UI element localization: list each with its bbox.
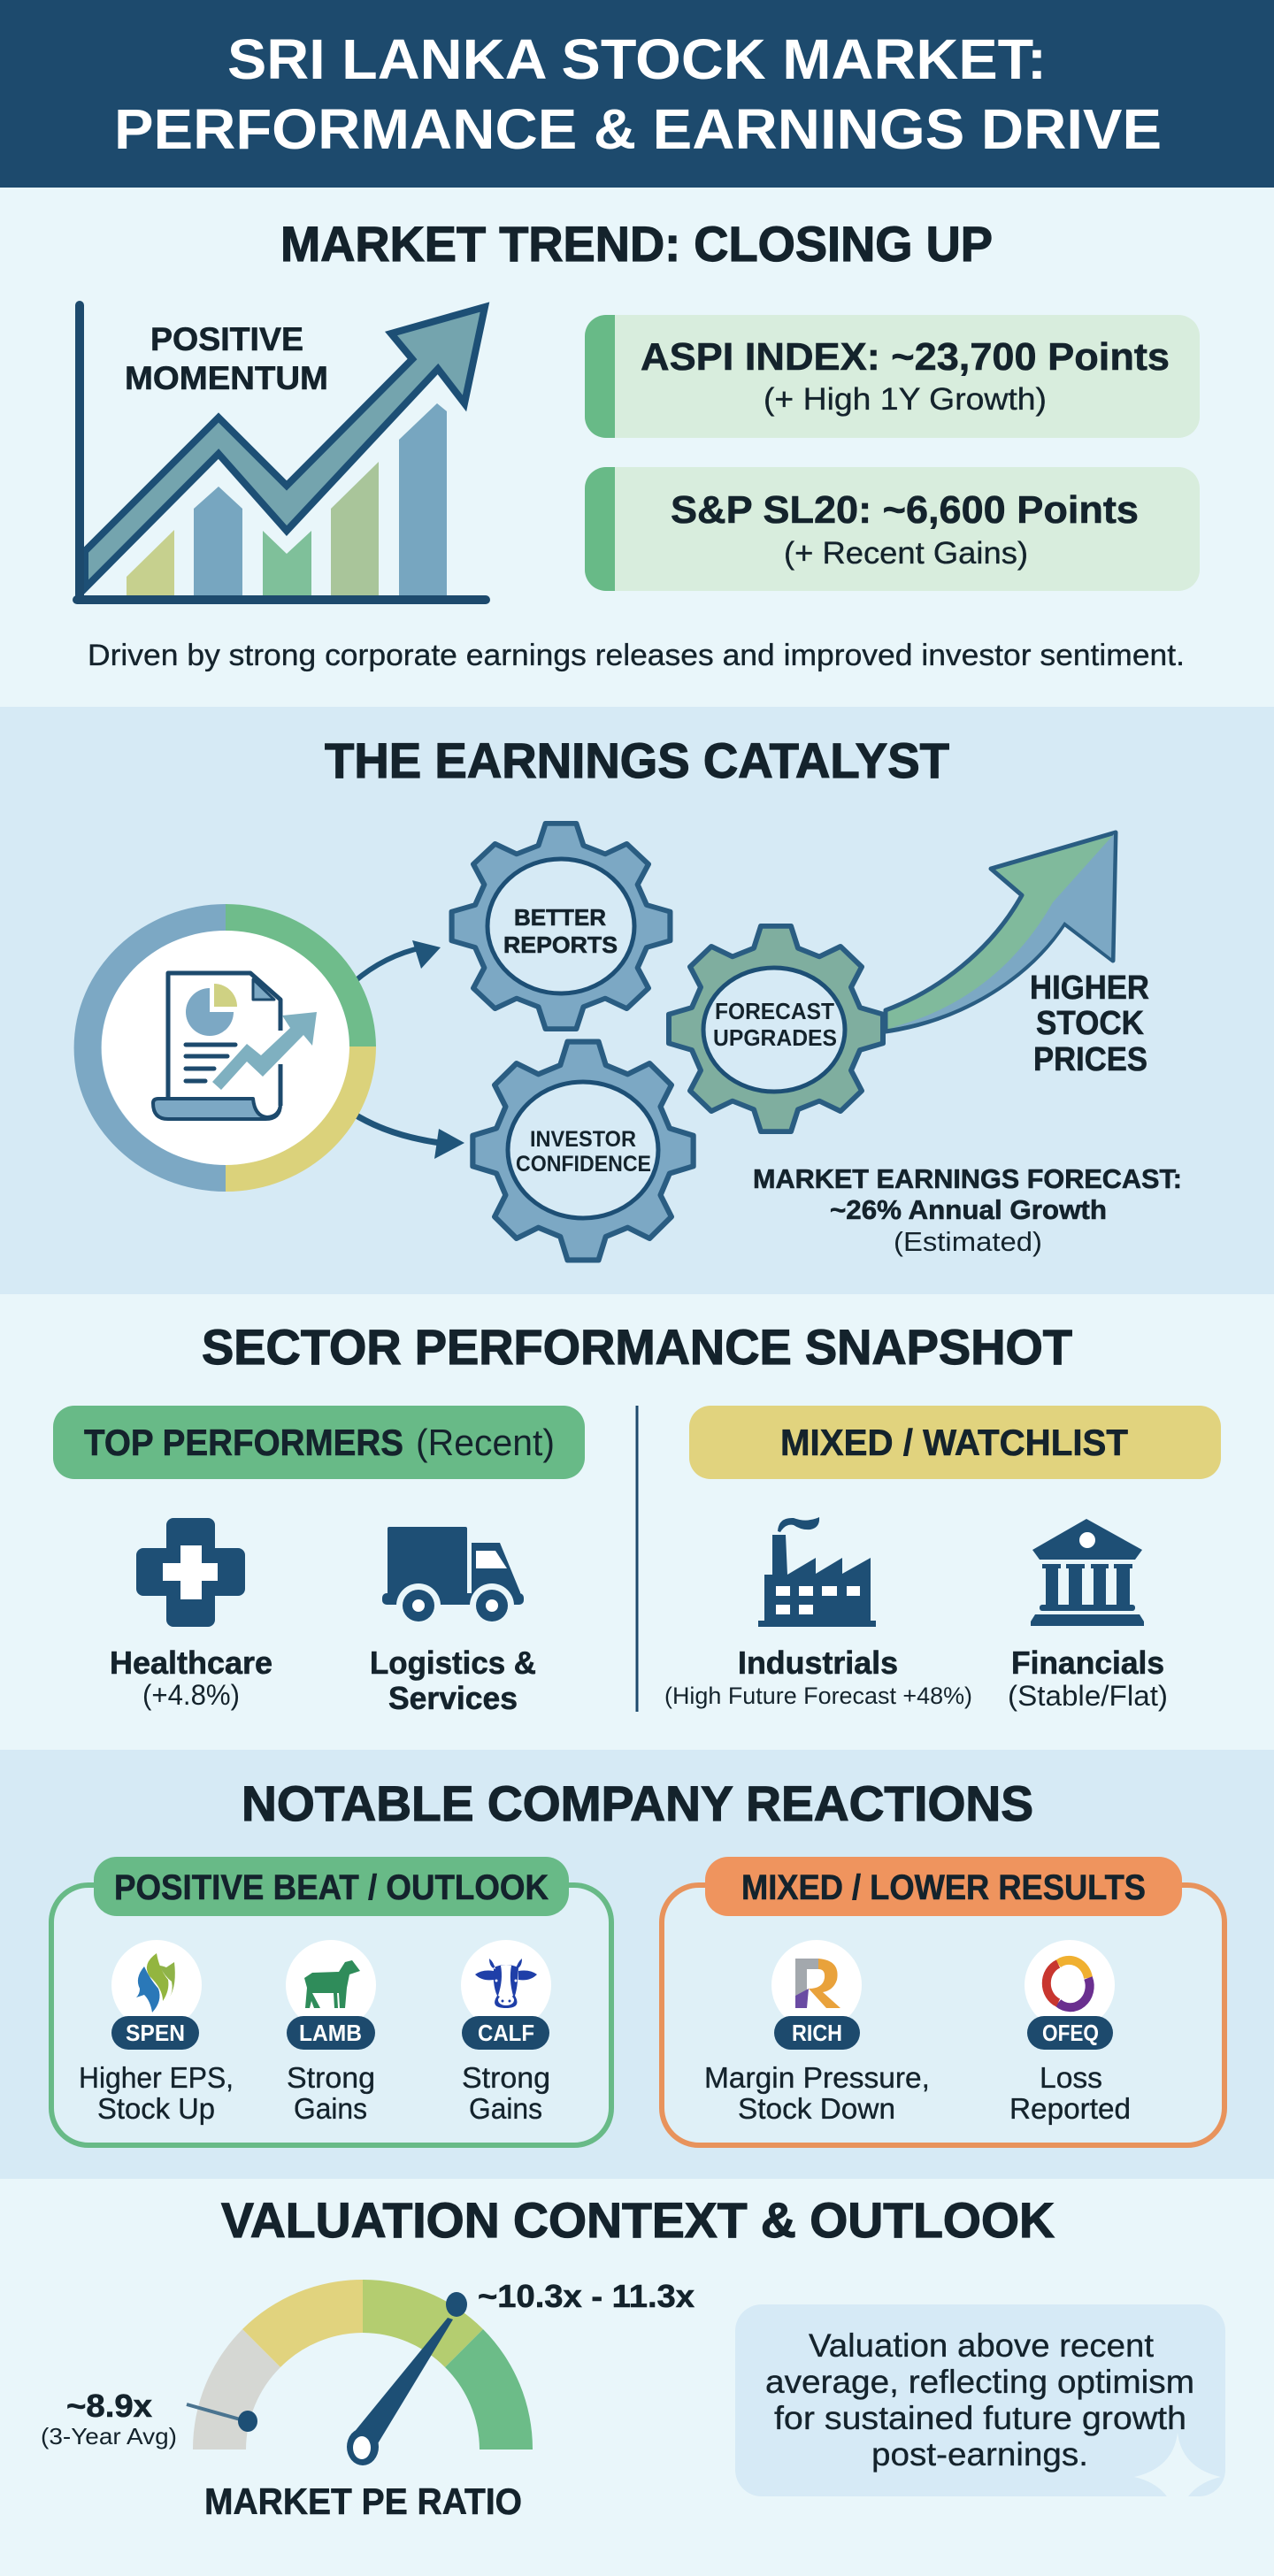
icon: document	[153, 973, 317, 1119]
gear: investor confidence: INVESTOR	[530, 1127, 636, 1152]
pill: mixed watchlist: MIXED / WATCHLIST	[780, 1422, 1128, 1463]
pill: mixed lower results	[705, 1857, 1182, 1916]
label: three year PE	[41, 2388, 177, 2450]
icon: bank	[1031, 1519, 1144, 1626]
text: market earnings forecast: MARKET EARNINGS FORECAST:	[753, 1163, 1182, 1194]
icon: report ring	[74, 904, 376, 1192]
ticker: LAMB: LAMB	[299, 2020, 362, 2046]
company: SPEN	[79, 1940, 234, 2125]
callout: valuation note: post-earnings.	[871, 2436, 1088, 2472]
card: ASPI index	[585, 315, 1200, 438]
gear: better reports: BETTER	[514, 904, 606, 931]
label: logistics	[370, 1644, 536, 1716]
text: market earnings forecast: (Estimated)	[894, 1226, 1042, 1257]
company: OFEQ: Reported	[1009, 2092, 1131, 2125]
company: OFEQ: Loss	[1040, 2061, 1102, 2094]
title: SRI LANKA STOCK MARKET:	[227, 27, 1047, 91]
callout: valuation note: for sustained future growth	[774, 2400, 1186, 2436]
chart label: MOMENTUM	[125, 360, 328, 396]
card: S&P SL20	[585, 467, 1200, 591]
label: three year PE: ~8.9x	[66, 2388, 152, 2424]
company: SPEN: Higher EPS,	[79, 2061, 234, 2094]
text: market driver note: Driven by strong corporate earnings releases and improved investor sentiment.	[88, 639, 1185, 672]
needle: current PE	[347, 2292, 467, 2465]
heading: company reactions: NOTABLE COMPANY REACTIONS	[242, 1775, 1033, 1831]
company: OFEQ	[1009, 1940, 1131, 2125]
arrow: ring to investor confidence	[352, 1113, 464, 1159]
ticker: RICH	[774, 2016, 860, 2050]
pill: positive beat: POSITIVE BEAT / OUTLOOK	[114, 1868, 549, 1907]
label: logistics: Services	[388, 1680, 518, 1716]
panel: earnings catalyst	[0, 707, 1274, 1294]
card: positive beat	[51, 1857, 611, 2145]
company: CALF: Gains	[469, 2092, 542, 2125]
chart label	[125, 321, 328, 396]
title: PERFORMANCE & EARNINGS DRIVE	[114, 97, 1162, 161]
title	[114, 27, 1162, 161]
ticker: OFEQ	[1027, 2016, 1113, 2050]
arrow label: PRICES	[1033, 1041, 1147, 1078]
card: ASPI index: ASPI INDEX: ~23,700 Points	[641, 335, 1170, 379]
label: logistics: Logistics &	[370, 1644, 536, 1681]
company: CALF	[461, 1940, 551, 2125]
heading: valuation context: VALUATION CONTEXT & OUTLOOK	[221, 2192, 1055, 2248]
ticker: CALF: CALF	[478, 2020, 534, 2046]
arrow: higher stock prices	[886, 832, 1149, 1078]
heading: market trend: MARKET TREND: CLOSING UP	[280, 216, 993, 272]
chart: positive momentum	[77, 305, 486, 600]
company: LAMB	[286, 1940, 376, 2125]
label: three year PE: (3-Year Avg)	[41, 2423, 177, 2450]
heading: earnings catalyst: THE EARNINGS CATALYST	[325, 732, 949, 788]
header banner	[0, 0, 1274, 188]
company: RICH	[704, 1940, 930, 2125]
icon: factory	[758, 1517, 876, 1627]
ticker: SPEN	[111, 2016, 199, 2050]
label: market PE ratio: MARKET PE RATIO	[204, 2480, 522, 2522]
card: mixed lower results	[662, 1857, 1224, 2145]
label: current PE range: ~10.3x - 11.3x	[478, 2278, 695, 2314]
text: market earnings forecast: ~26% Annual Growth	[830, 1194, 1107, 1225]
panel: sector performance	[0, 1294, 1274, 1750]
gear: better reports: REPORTS	[503, 932, 618, 958]
arrow label: STOCK	[1036, 1005, 1145, 1042]
gear: investor confidence	[472, 1042, 694, 1260]
text: market earnings forecast	[753, 1163, 1182, 1257]
panel: market trend	[0, 188, 1274, 707]
label: healthcare: Healthcare	[110, 1644, 272, 1681]
panel: company reactions	[0, 1750, 1274, 2179]
company: CALF: Strong	[462, 2061, 550, 2094]
pill: mixed watchlist	[689, 1406, 1221, 1479]
pill: mixed lower results: MIXED / LOWER RESULTS	[741, 1868, 1146, 1907]
gear: investor confidence: CONFIDENCE	[516, 1152, 651, 1177]
gear: better reports	[452, 824, 670, 1029]
label: financials: (Stable/Flat)	[1008, 1680, 1168, 1712]
callout: valuation note: average, reflecting optimism	[765, 2364, 1194, 2400]
label: industrials: (High Future Forecast +48%)	[664, 1683, 972, 1709]
ticker: RICH: RICH	[792, 2020, 842, 2046]
callout: valuation note: Valuation above recent	[809, 2327, 1155, 2364]
panel: valuation context	[0, 2179, 1274, 2576]
label: industrials: Industrials	[738, 1644, 898, 1681]
arrow label	[1030, 970, 1149, 1078]
pill: top performers: (Recent)	[416, 1422, 555, 1463]
ticker: CALF	[462, 2016, 549, 2050]
chart: PE gauge	[41, 2278, 695, 2522]
marker: three year average	[187, 2404, 257, 2432]
label: industrials	[664, 1644, 972, 1709]
pill: top performers: TOP PERFORMERS	[84, 1422, 403, 1463]
company: SPEN: Stock Up	[97, 2092, 215, 2125]
company: LAMB: Strong	[287, 2061, 375, 2094]
gear: forecast upgrades: UPGRADES	[713, 1024, 837, 1051]
card: S&P SL20: (+ Recent Gains)	[784, 536, 1028, 571]
arrow: ring to better reports	[354, 940, 441, 982]
pill: positive beat	[94, 1857, 569, 1916]
card: ASPI index: (+ High 1Y Growth)	[764, 382, 1047, 417]
heading: sector performance: SECTOR PERFORMANCE SNAPSHOT	[202, 1319, 1072, 1375]
label: healthcare	[110, 1644, 272, 1711]
card: S&P SL20: S&P SL20: ~6,600 Points	[671, 488, 1139, 532]
arrow label: HIGHER	[1030, 970, 1149, 1007]
icon: healthcare cross	[136, 1518, 245, 1627]
label: financials	[1008, 1644, 1168, 1712]
ticker: LAMB	[287, 2016, 375, 2050]
ticker: SPEN: SPEN	[126, 2020, 185, 2046]
company: LAMB: Gains	[294, 2092, 367, 2125]
ticker: OFEQ: OFEQ	[1042, 2020, 1099, 2046]
gear: forecast upgrades	[669, 926, 883, 1131]
gear: forecast upgrades: FORECAST	[715, 998, 834, 1024]
label: financials: Financials	[1011, 1644, 1164, 1681]
chart label: POSITIVE	[150, 321, 303, 357]
company: RICH: Margin Pressure,	[704, 2061, 930, 2094]
company: RICH: Stock Down	[738, 2092, 895, 2125]
label: healthcare: (+4.8%)	[142, 1679, 240, 1711]
pill: top performers	[53, 1406, 585, 1479]
icon: logistics truck	[382, 1527, 524, 1628]
callout: valuation note	[735, 2304, 1225, 2526]
